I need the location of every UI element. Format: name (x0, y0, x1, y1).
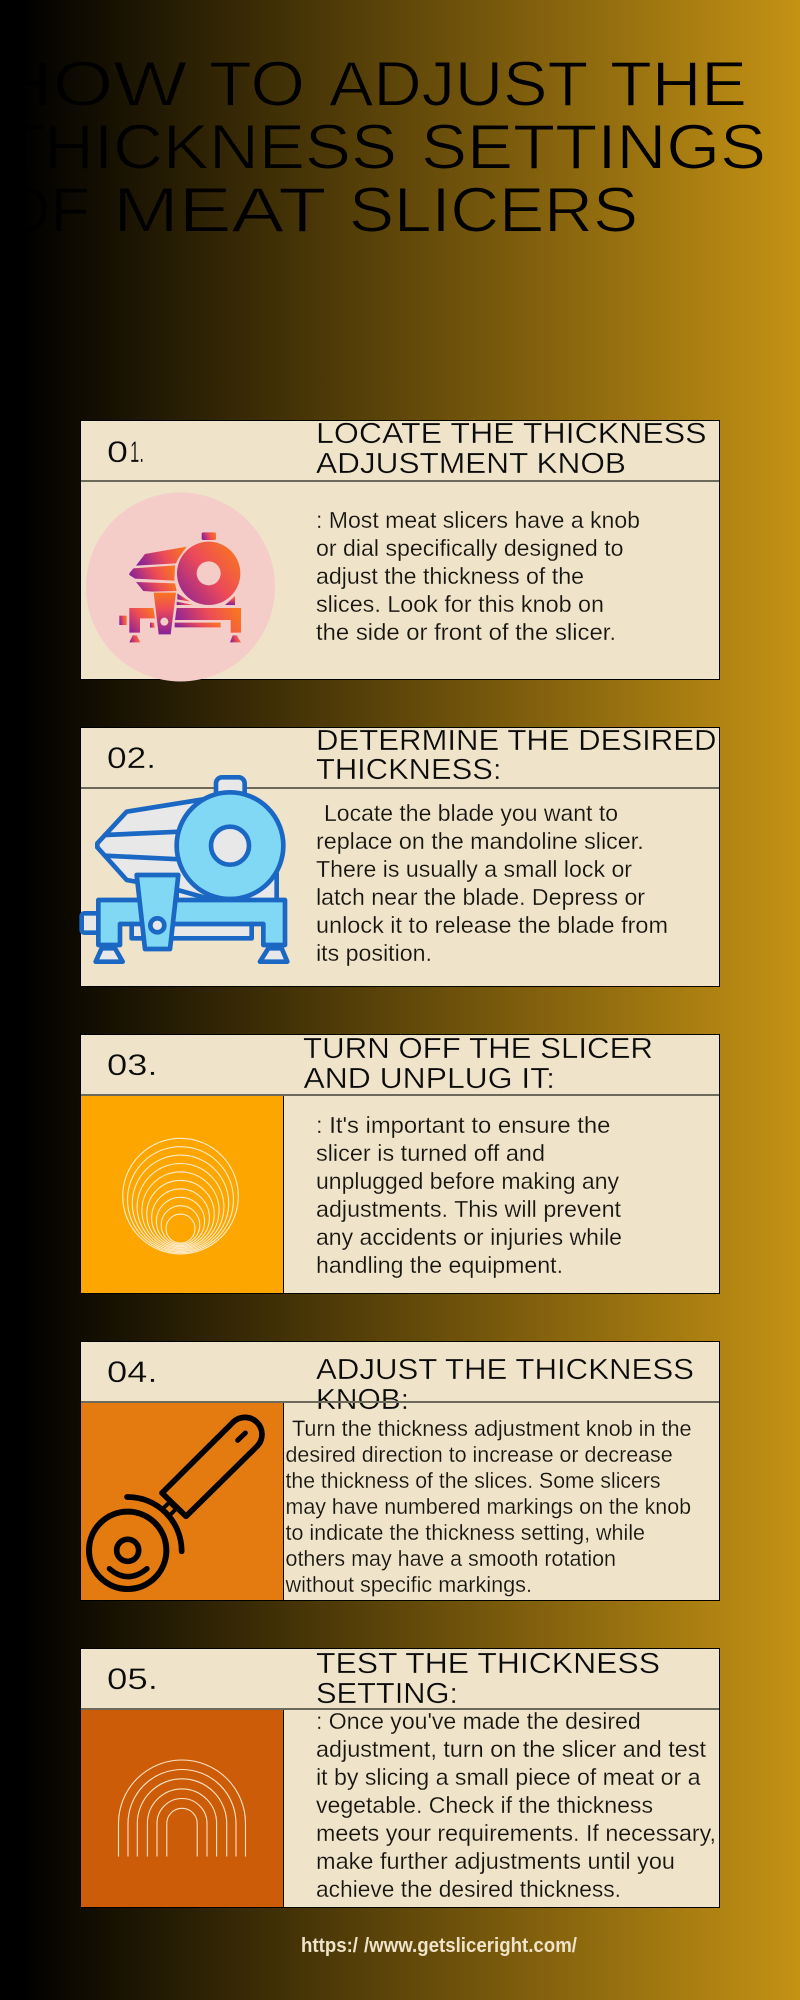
step 4 number: 04. (107, 1356, 158, 1389)
step 1 body text (316, 507, 640, 645)
step 2 heading: DETERMINE THE DESIRED (316, 725, 716, 757)
step 1 body text: the side or front of the slicer. (316, 619, 616, 645)
title: THE (610, 50, 747, 120)
step 5 heading (316, 1648, 660, 1710)
step 3 body text: handling the equipment. (316, 1252, 563, 1278)
panel: step 2 (80, 725, 720, 986)
icon: concentric circles on amber panel (81, 1096, 284, 1293)
step 4 body text: desired direction to increase or decrease (286, 1442, 673, 1467)
step 5 heading: TEST THE THICKNESS (316, 1648, 660, 1680)
step 3 body text: slicer is turned off and (316, 1140, 545, 1166)
panel: step 3 (80, 1033, 720, 1294)
icon: nested arches on burnt orange panel (81, 1710, 284, 1907)
step 3 body text: any accidents or injuries while (316, 1224, 622, 1250)
step 2 number: 02. (107, 742, 156, 775)
footer url: https:/ (301, 1934, 358, 1957)
step 2 body text: Locate the blade you want to (324, 800, 618, 826)
step 2 body text: latch near the blade. Depress or (316, 884, 645, 910)
title: MEAT (113, 176, 325, 246)
title (0, 50, 766, 246)
step 4 heading: KNOB: (316, 1384, 409, 1416)
step 3 heading (303, 1033, 653, 1095)
step 1 body text: adjust the thickness of the (316, 563, 584, 589)
title: THICKNESS (2, 112, 397, 182)
step 3 body text: adjustments. This will prevent (316, 1196, 621, 1222)
step 2 body text: its position. (316, 940, 432, 966)
title: OF (0, 176, 90, 246)
step 5 number: 05. (107, 1663, 158, 1696)
step 3 body text: : It's important to ensure the (316, 1112, 610, 1138)
step 2 heading: THICKNESS: (316, 754, 501, 786)
step 1 heading: ADJUSTMENT KNOB (316, 448, 626, 480)
title: ADJUST (329, 50, 587, 120)
step 4 body text: to indicate the thickness setting, while (286, 1520, 645, 1545)
step 2 body text: unlock it to release the blade from (316, 912, 668, 938)
title: SLICERS (349, 176, 638, 246)
title: TO (209, 50, 305, 120)
step 4 body text: Turn the thickness adjustment knob in the (292, 1416, 692, 1441)
step 3 heading: AND UNPLUG IT: (304, 1063, 555, 1095)
step 4 body text: may have numbered markings on the knob (286, 1494, 691, 1519)
step 5 body text: adjustment, turn on the slicer and test (316, 1736, 706, 1762)
step 5 body text: vegetable. Check if the thickness (316, 1792, 653, 1818)
step 4 body text: without specific markings. (285, 1572, 532, 1597)
step 2 heading (316, 725, 716, 786)
step 4 body text (285, 1416, 692, 1597)
panel: step 4 (80, 1342, 720, 1600)
step 1 heading: LOCATE THE THICKNESS (316, 418, 707, 450)
step 3 number: 03. (107, 1049, 158, 1082)
panel: step 5 (80, 1648, 720, 1908)
footer url: /www.getsliceright.com/ (364, 1934, 577, 1957)
step 5 body text: make further adjustments until you (316, 1848, 675, 1874)
step 1 number: 0 (107, 436, 128, 469)
step 2 body text: There is usually a small lock or (316, 856, 632, 882)
step 3 heading: TURN OFF THE SLICER (303, 1033, 653, 1065)
step 4 body text: others may have a smooth rotation (286, 1546, 616, 1571)
step 5 body text: meets your requirements. If necessary, (316, 1820, 716, 1846)
step 3 body text: unplugged before making any (316, 1168, 619, 1194)
step 1 number: 1. (130, 436, 144, 469)
panel: step 1 (80, 418, 720, 682)
icon: pink circle with gradient meat slicer (86, 492, 275, 682)
step 5 body text: achieve the desired thickness. (316, 1876, 621, 1902)
step 3 body text (316, 1112, 622, 1278)
step 2 body text: replace on the mandoline slicer. (316, 828, 644, 854)
step 1 body text: or dial specifically designed to (316, 535, 624, 561)
icon: pizza cutter on orange panel (81, 1403, 284, 1600)
step 5 body text: : Once you've made the desired (316, 1708, 641, 1734)
step 4 heading: ADJUST THE THICKNESS (316, 1354, 694, 1386)
step 4 heading (316, 1354, 694, 1416)
step 1 body text: : Most meat slicers have a knob (316, 507, 640, 533)
step 5 body text (316, 1708, 716, 1902)
step 5 heading: SETTING: (316, 1678, 458, 1710)
step 5 body text: it by slicing a small piece of meat or a (316, 1764, 701, 1790)
step 4 body text: the thickness of the slices. Some slicers (286, 1468, 660, 1493)
icon: blue meat slicer (82, 777, 287, 962)
step 1 heading (316, 418, 707, 480)
title: HOW (0, 50, 187, 120)
title: SETTINGS (421, 112, 766, 182)
step 2 body text (316, 800, 668, 966)
step 1 body text: slices. Look for this knob on (316, 591, 604, 617)
